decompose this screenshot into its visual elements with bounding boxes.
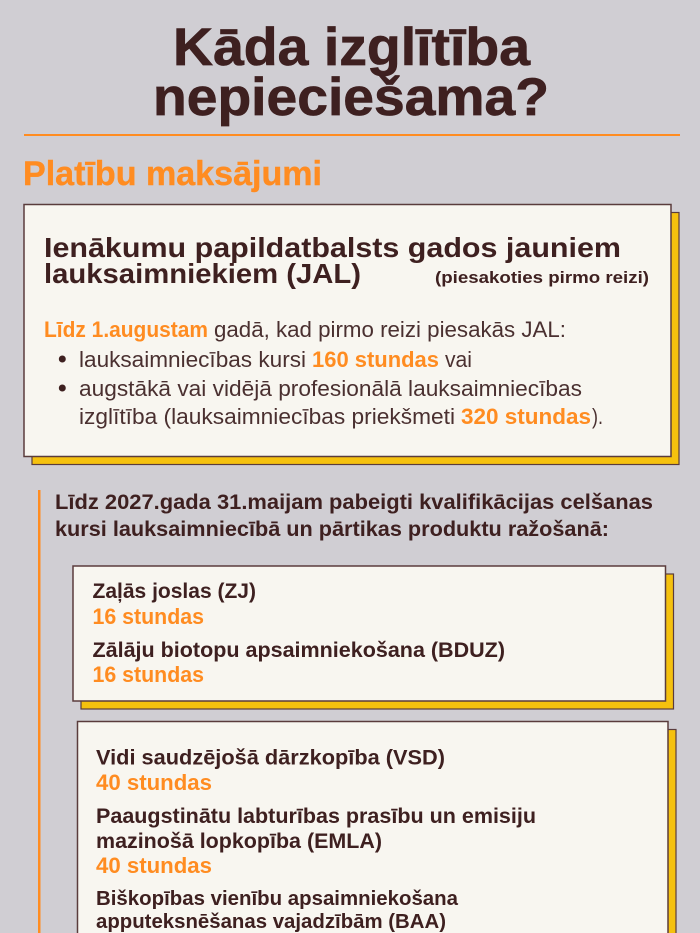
JAL requirements text xyxy=(44,317,603,429)
JAL requirements text: gadā, kad pirmo reizi piesakās JAL: xyxy=(214,317,566,342)
qualification intro text: kursi lauksaimniecībā un pārtikas produktu ražošanā: xyxy=(55,517,609,541)
card shadow xyxy=(81,574,674,709)
course VSD xyxy=(96,746,445,795)
course ZJ: 16 stundas xyxy=(92,604,204,629)
panel: 16 hour courses xyxy=(73,566,674,709)
qualification intro text: Līdz 2027.gada 31.maijam pabeigti kvalifikācijas celšanas xyxy=(55,490,653,514)
panel: JAL xyxy=(24,204,679,464)
title xyxy=(153,18,549,127)
JAL requirements text: izglītība (lauksaimniecības priekšmeti xyxy=(79,404,455,429)
orange vertical bar xyxy=(38,490,40,933)
course EMLA: Paaugstinātu labturības prasību un emisiju xyxy=(96,804,536,828)
JAL requirements text: ). xyxy=(592,404,603,429)
JAL heading: lauksaimniekiem (JAL) xyxy=(44,258,361,289)
section heading: Platību maksājumi xyxy=(23,155,322,193)
course EMLA: 40 stundas xyxy=(96,853,212,878)
card shadow xyxy=(85,730,676,933)
JAL requirements text: 160 stundas xyxy=(312,347,439,372)
JAL requirements text: lauksaimniecības kursi xyxy=(79,347,306,372)
course BAA xyxy=(96,887,459,933)
JAL requirements text: vai xyxy=(445,347,472,372)
JAL heading: Ienākumu papildatbalsts gados jauniem xyxy=(44,232,621,263)
course BDUZ: 16 stundas xyxy=(92,662,204,687)
course VSD: Vidi saudzējošā dārzkopība (VSD) xyxy=(96,746,445,770)
course BAA: apputeksnēšanas vajadzībām (BAA) xyxy=(96,910,446,933)
course ZJ xyxy=(92,579,256,629)
qualification intro text xyxy=(55,490,653,541)
JAL requirements text: augstākā vai vidējā profesionālā lauksaimniecības xyxy=(79,376,582,401)
course BDUZ: Zālāju biotopu apsaimniekošana (BDUZ) xyxy=(92,638,505,662)
JAL heading: (piesakoties pirmo reizi) xyxy=(435,268,649,287)
course BDUZ xyxy=(92,638,505,687)
course BAA: Biškopības vienību apsaimniekošana xyxy=(96,887,459,910)
JAL heading xyxy=(44,232,649,289)
course VSD: 40 stundas xyxy=(96,770,212,795)
JAL requirements text: Līdz 1.augustam xyxy=(44,317,208,342)
course EMLA: mazinošā lopkopība (EMLA) xyxy=(96,829,382,853)
course ZJ: Zaļās joslas (ZJ) xyxy=(92,579,256,603)
card shadow xyxy=(32,212,679,464)
panel: 40 hour courses xyxy=(78,722,676,933)
title: Kāda izglītība xyxy=(173,18,531,77)
JAL requirements text: 320 stundas xyxy=(461,404,591,429)
title: nepieciešama? xyxy=(153,68,549,127)
course EMLA xyxy=(96,804,536,878)
